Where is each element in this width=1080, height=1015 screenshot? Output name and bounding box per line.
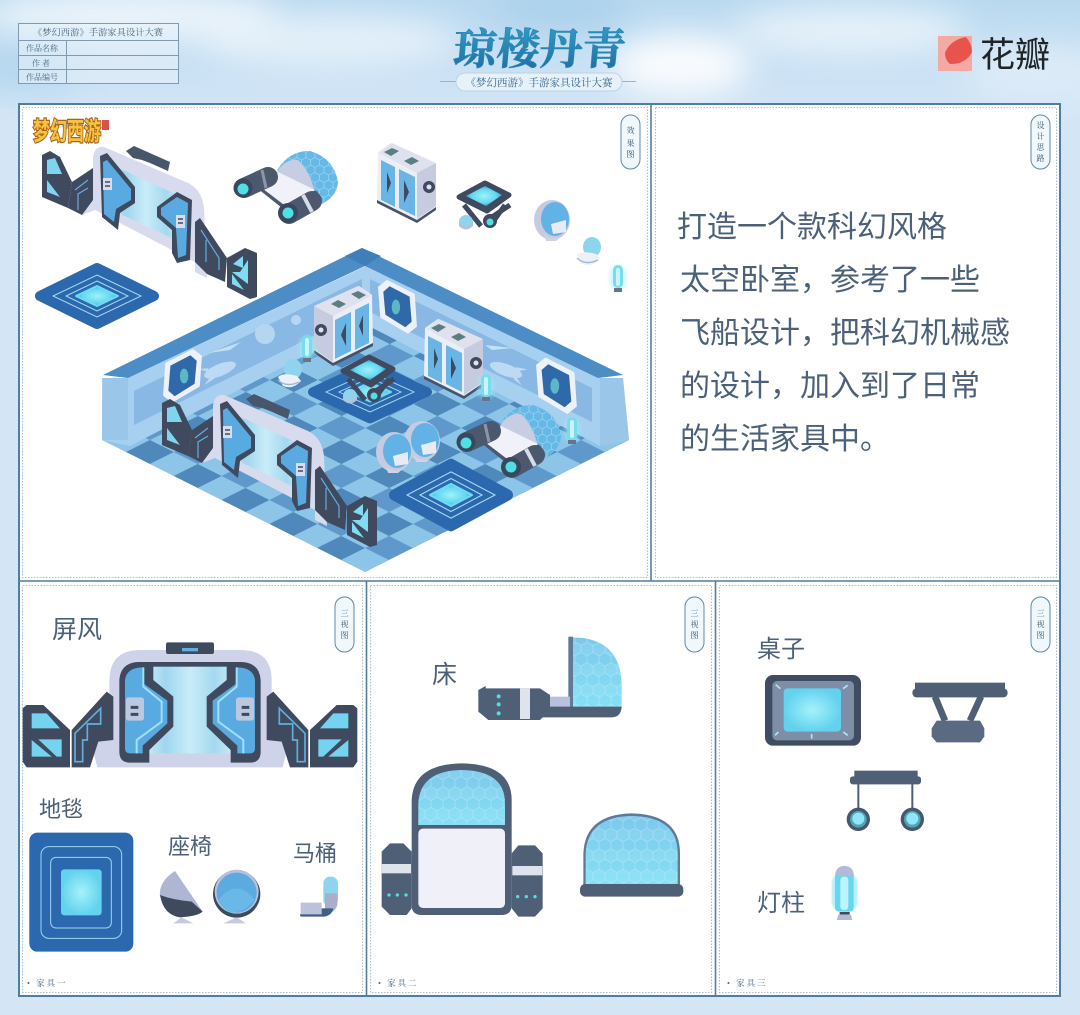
table catalog view [459,183,510,230]
bed front view [382,763,543,917]
label: chair: 座椅 [168,834,212,859]
room screen [162,394,377,547]
table side view [912,683,1008,742]
title: 《梦幻西游》手游家具设计大赛 [466,76,613,89]
toilet view [300,877,338,917]
label: bed: 床 [432,661,457,689]
rug catalog view [40,268,154,324]
table top view [765,675,861,746]
entry info table: 作者 [32,58,52,68]
table views [765,675,1008,920]
entry info table [18,24,178,84]
table front view [847,771,924,831]
tag: three views: 三 [1036,609,1044,618]
title [440,26,636,91]
entry info table: 《梦幻西游》手游家具设计大赛 [33,26,164,38]
room rugs [313,365,508,526]
screen front view [23,642,357,767]
tag: design idea: 路 [1036,153,1044,163]
design description text [677,211,1010,456]
bed views [382,637,683,917]
tag: three views: 图 [1036,631,1044,640]
label: table: 桌子 [757,636,805,663]
game logo: 梦幻西游 [33,118,101,146]
panel: effect view [33,115,640,572]
label: toilet: 马桶 [293,841,337,866]
tag: effect view: 效 [626,125,634,135]
label: screen: 屏风 [52,616,102,644]
egg chair catalog view [534,200,570,241]
room lamps [299,335,580,444]
tag: three views: 视 [340,620,348,629]
lamp catalog view [610,265,626,292]
label: rug: 地毯 [39,797,83,822]
design description text: 打造一个款科幻风格 [677,211,947,244]
caption: furniture three: • 家具三 [727,978,768,988]
room toilet [278,359,302,387]
design description text: 飞船设计，把科幻机械感 [680,317,1010,350]
tag: design idea: 思 [1036,143,1046,152]
tag: three views: 三 [690,609,698,618]
bed back view [580,813,683,897]
panel: furniture three [727,597,1050,988]
toilet catalog view [577,237,601,265]
tag: three views: 图 [690,631,698,640]
room chairs [376,421,440,473]
entry info table: 作品编号 [26,72,58,82]
wardrobe catalog view [377,143,436,223]
panel: furniture one [23,597,357,988]
tag: design idea: 计 [1036,131,1044,141]
tag: design idea: 设 [1036,121,1044,130]
tag: three views [335,597,354,652]
tag: three views [685,597,704,652]
room wardrobes [314,286,483,399]
tag: effect view: 果 [626,139,634,148]
tag: effect view [621,115,640,169]
design description text: 太空卧室，参考了一些 [680,264,980,297]
tag: three views [1031,597,1050,652]
room bed [456,405,561,477]
room walls [102,248,629,446]
title: 琼楼丹青 [452,26,628,74]
windows [164,277,576,417]
tag: three views: 三 [340,609,348,618]
entry info table: 作品名称 [26,43,59,53]
panel: design idea [677,115,1050,456]
bed catalog view [234,151,338,223]
huaban logo [938,36,1050,75]
chair views [160,870,260,923]
lamp front view [832,866,858,920]
caption: furniture one: • 家具一 [27,978,68,988]
caption: furniture two: • 家具二 [378,978,419,988]
tag: three views: 视 [1036,620,1044,629]
rug plan view [29,833,133,952]
isometric room [102,248,629,572]
label: lamp: 灯柱 [757,890,805,917]
tag: design idea [1031,115,1050,169]
bed side view [478,637,622,720]
design description text: 的设计，加入到了日常 [680,370,980,403]
room table [343,357,394,404]
tag: effect view: 图 [626,150,634,159]
huaban logo: 花瓣 [980,36,1050,75]
screen catalog view [42,146,257,299]
tag: three views: 视 [690,620,698,629]
tag: three views: 图 [340,631,348,640]
room floor [102,310,629,572]
panel: furniture two [378,597,704,988]
design description text: 的生活家具中。 [680,423,890,456]
